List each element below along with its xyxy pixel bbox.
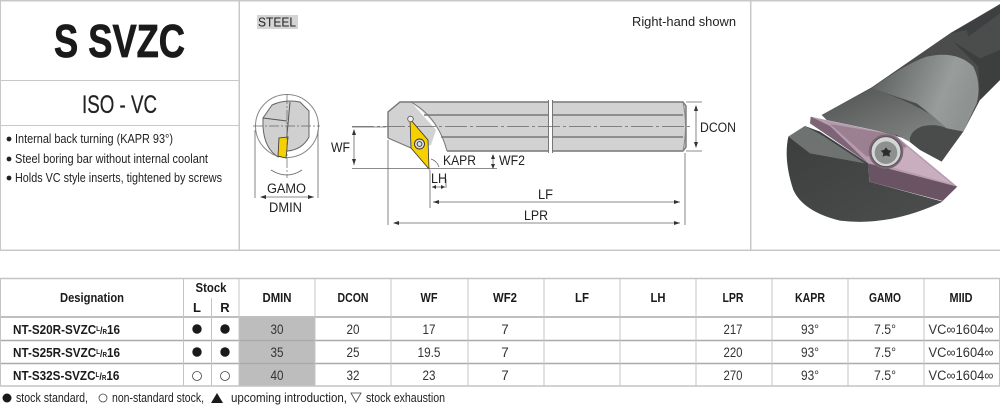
- table: row NT-S20R: VC∞1604∞: [928, 322, 994, 337]
- table: row NT-S32S: 32: [346, 368, 360, 383]
- table: row NT-S25R: /: [100, 349, 103, 360]
- legend: stock standard,: [16, 391, 88, 405]
- table: row NT-S32S: L: [96, 372, 99, 379]
- table: row NT-S32S: 93°: [801, 368, 819, 383]
- table: row NT-S25R: VC∞1604∞: [928, 345, 994, 360]
- table: header row: WF2: [493, 290, 517, 305]
- table: row NT-S32S: NT-S32S-SVZC: [13, 368, 96, 383]
- table: header row: MIID: [950, 290, 972, 305]
- table: row NT-S25R: 7.5°: [874, 345, 896, 360]
- feature list: Steel boring bar without internal coolant: [15, 152, 208, 166]
- title: S SVZC: [54, 15, 185, 67]
- table: row NT-S25R: 93°: [801, 345, 819, 360]
- table: header row: [60, 280, 972, 315]
- subtitle: ISO - VC: [82, 91, 157, 119]
- table: header row: DCON: [338, 290, 368, 305]
- table: row NT-S25R: [13, 345, 994, 360]
- label: DCON: DCON: [700, 120, 736, 135]
- table: row NT-S20R: R16: [103, 322, 120, 337]
- table: row NT-S32S: /: [99, 372, 102, 383]
- table: row NT-S25R: L: [96, 349, 100, 356]
- table: row NT-S20R: 20: [346, 322, 360, 337]
- legend: [2, 391, 445, 405]
- table: row NT-S20R: 217: [724, 322, 742, 337]
- table: row NT-S32S: 270: [724, 368, 742, 383]
- legend: non-standard stock,: [112, 391, 204, 405]
- label: KAPR: KAPR: [443, 153, 476, 168]
- table: row NT-S32S: VC∞1604∞: [928, 368, 994, 383]
- table: row NT-S20R: [13, 322, 994, 337]
- table: row NT-S25R: 220: [724, 345, 742, 360]
- table: row NT-S20R: 7: [501, 322, 509, 337]
- note: right-hand shown: Right-hand shown: [632, 14, 736, 29]
- table: row NT-S32S: 23: [422, 368, 436, 383]
- table: row NT-S32S: R16: [102, 368, 119, 383]
- table: header row: LH: [650, 290, 666, 305]
- table: header row: WF: [420, 290, 438, 305]
- label: LPR: LPR: [524, 208, 548, 223]
- table: row NT-S20R: 7.5°: [874, 322, 896, 337]
- material tag: STEEL: [258, 14, 296, 30]
- icon: yellow insert: [408, 116, 429, 169]
- table: row NT-S32S: 7.5°: [874, 368, 896, 383]
- table: row NT-S20R: 93°: [801, 322, 819, 337]
- table: header row: LF: [575, 290, 589, 305]
- table: grid: [0, 278, 1000, 386]
- table: row NT-S25R: 19.5: [418, 345, 440, 360]
- label: GAMO: GAMO: [267, 181, 306, 196]
- table: row NT-S25R: 7: [501, 345, 509, 360]
- table: [0, 278, 1000, 386]
- table: header row: Designation: [60, 290, 124, 305]
- table: header row: R: [220, 300, 230, 315]
- dimension lines: [352, 102, 702, 225]
- table: row NT-S20R: L: [96, 326, 100, 333]
- table: DMIN highlighted column: [240, 318, 314, 386]
- legend: upcoming introduction,: [231, 391, 347, 405]
- panel: frame: [0, 0, 1000, 251]
- label: LH: LH: [431, 171, 447, 186]
- table: header row: Stock: [196, 280, 227, 295]
- table: row NT-S32S: 40: [270, 368, 284, 383]
- table: header row: LPR: [722, 290, 744, 305]
- table: row NT-S25R: R16: [103, 345, 120, 360]
- legend: stock exhaustion: [366, 391, 445, 405]
- feature list: Internal back turning (KAPR 93°): [15, 132, 173, 146]
- diagram: side view of boring bar: [331, 100, 736, 225]
- table: header row: DMIN: [262, 290, 292, 305]
- table: row NT-S25R: 35: [270, 345, 284, 360]
- table: row NT-S25R: NT-S25R-SVZC: [13, 345, 96, 360]
- diagram: end view: [253, 94, 320, 215]
- table: row NT-S20R: 30: [270, 322, 284, 337]
- feature list: [7, 132, 222, 185]
- label: WF: WF: [331, 140, 350, 155]
- label: DMIN: DMIN: [269, 200, 302, 215]
- table: row NT-S20R: NT-S20R-SVZC: [13, 322, 96, 337]
- table: header row: GAMO: [869, 290, 901, 305]
- table: header row: L: [193, 300, 201, 315]
- table: header row: KAPR: [795, 290, 825, 305]
- label: WF2: WF2: [499, 153, 525, 168]
- table: row NT-S32S: [13, 368, 994, 383]
- photo: boring bar with insert: [787, 4, 1000, 222]
- table: row NT-S32S: 7: [501, 368, 509, 383]
- table: row NT-S20R: 17: [422, 322, 436, 337]
- table: row NT-S20R: /: [100, 326, 103, 337]
- feature list: Holds VC style inserts, tightened by screws: [15, 171, 222, 185]
- label: LF: LF: [538, 187, 553, 202]
- table: row NT-S25R: 25: [346, 345, 360, 360]
